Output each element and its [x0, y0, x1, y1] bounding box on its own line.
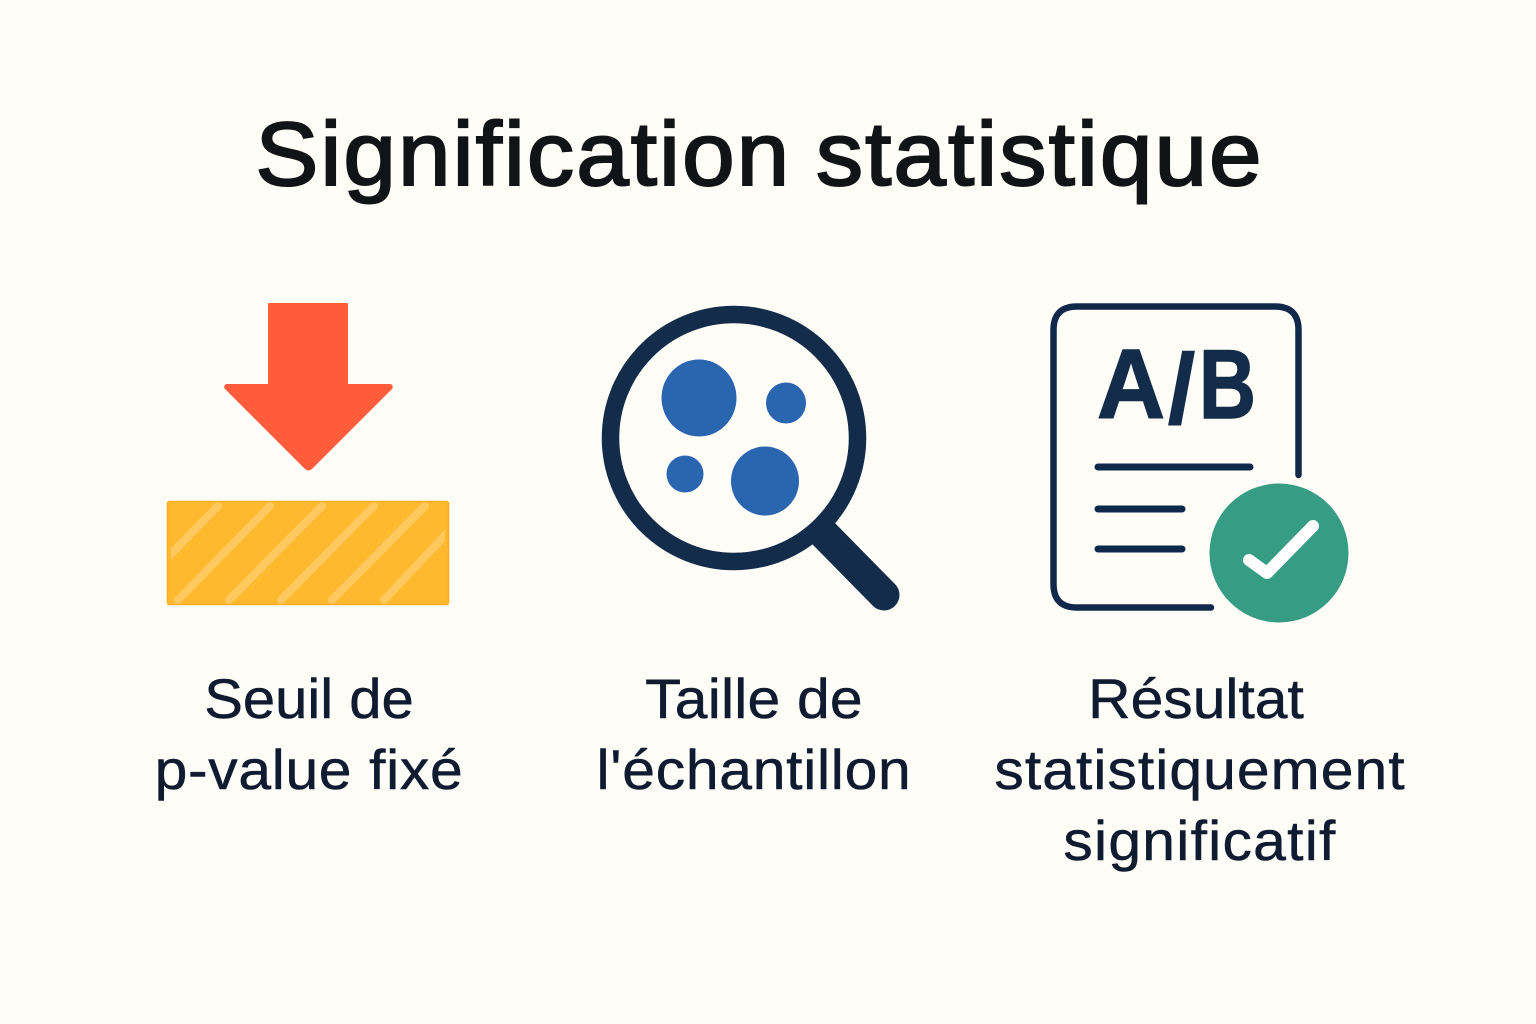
threshold bar — [168, 502, 450, 604]
A/B label: / — [1168, 334, 1195, 444]
label: threshold — [155, 667, 463, 801]
document outline — [1054, 306, 1298, 608]
label: significant result: statistiquement — [994, 738, 1406, 801]
down arrow — [224, 303, 393, 470]
sample dots — [662, 360, 806, 516]
document text lines — [1098, 467, 1250, 549]
title: Signification statistique — [255, 105, 1264, 205]
icon: down arrow over hatched threshold bar — [168, 303, 450, 604]
label: sample size: Taille de — [645, 667, 863, 730]
check badge — [1210, 484, 1348, 622]
A/B label — [1097, 329, 1256, 444]
label: significant result: Résultat — [1088, 667, 1304, 730]
handle — [824, 534, 884, 595]
label: threshold: p-value fixé — [155, 738, 463, 801]
icon: A/B document with check badge — [1054, 306, 1348, 622]
icon: magnifying glass with dots — [610, 314, 884, 595]
label: sample size: l'échantillon — [596, 738, 911, 801]
A/B label: B — [1199, 329, 1256, 439]
A/B label: A — [1097, 329, 1165, 439]
lens — [610, 314, 858, 562]
label: threshold: Seuil de — [204, 667, 414, 730]
label: sample size — [596, 667, 911, 801]
label: significant result: significatif — [1063, 809, 1337, 872]
label: significant result — [994, 667, 1406, 872]
